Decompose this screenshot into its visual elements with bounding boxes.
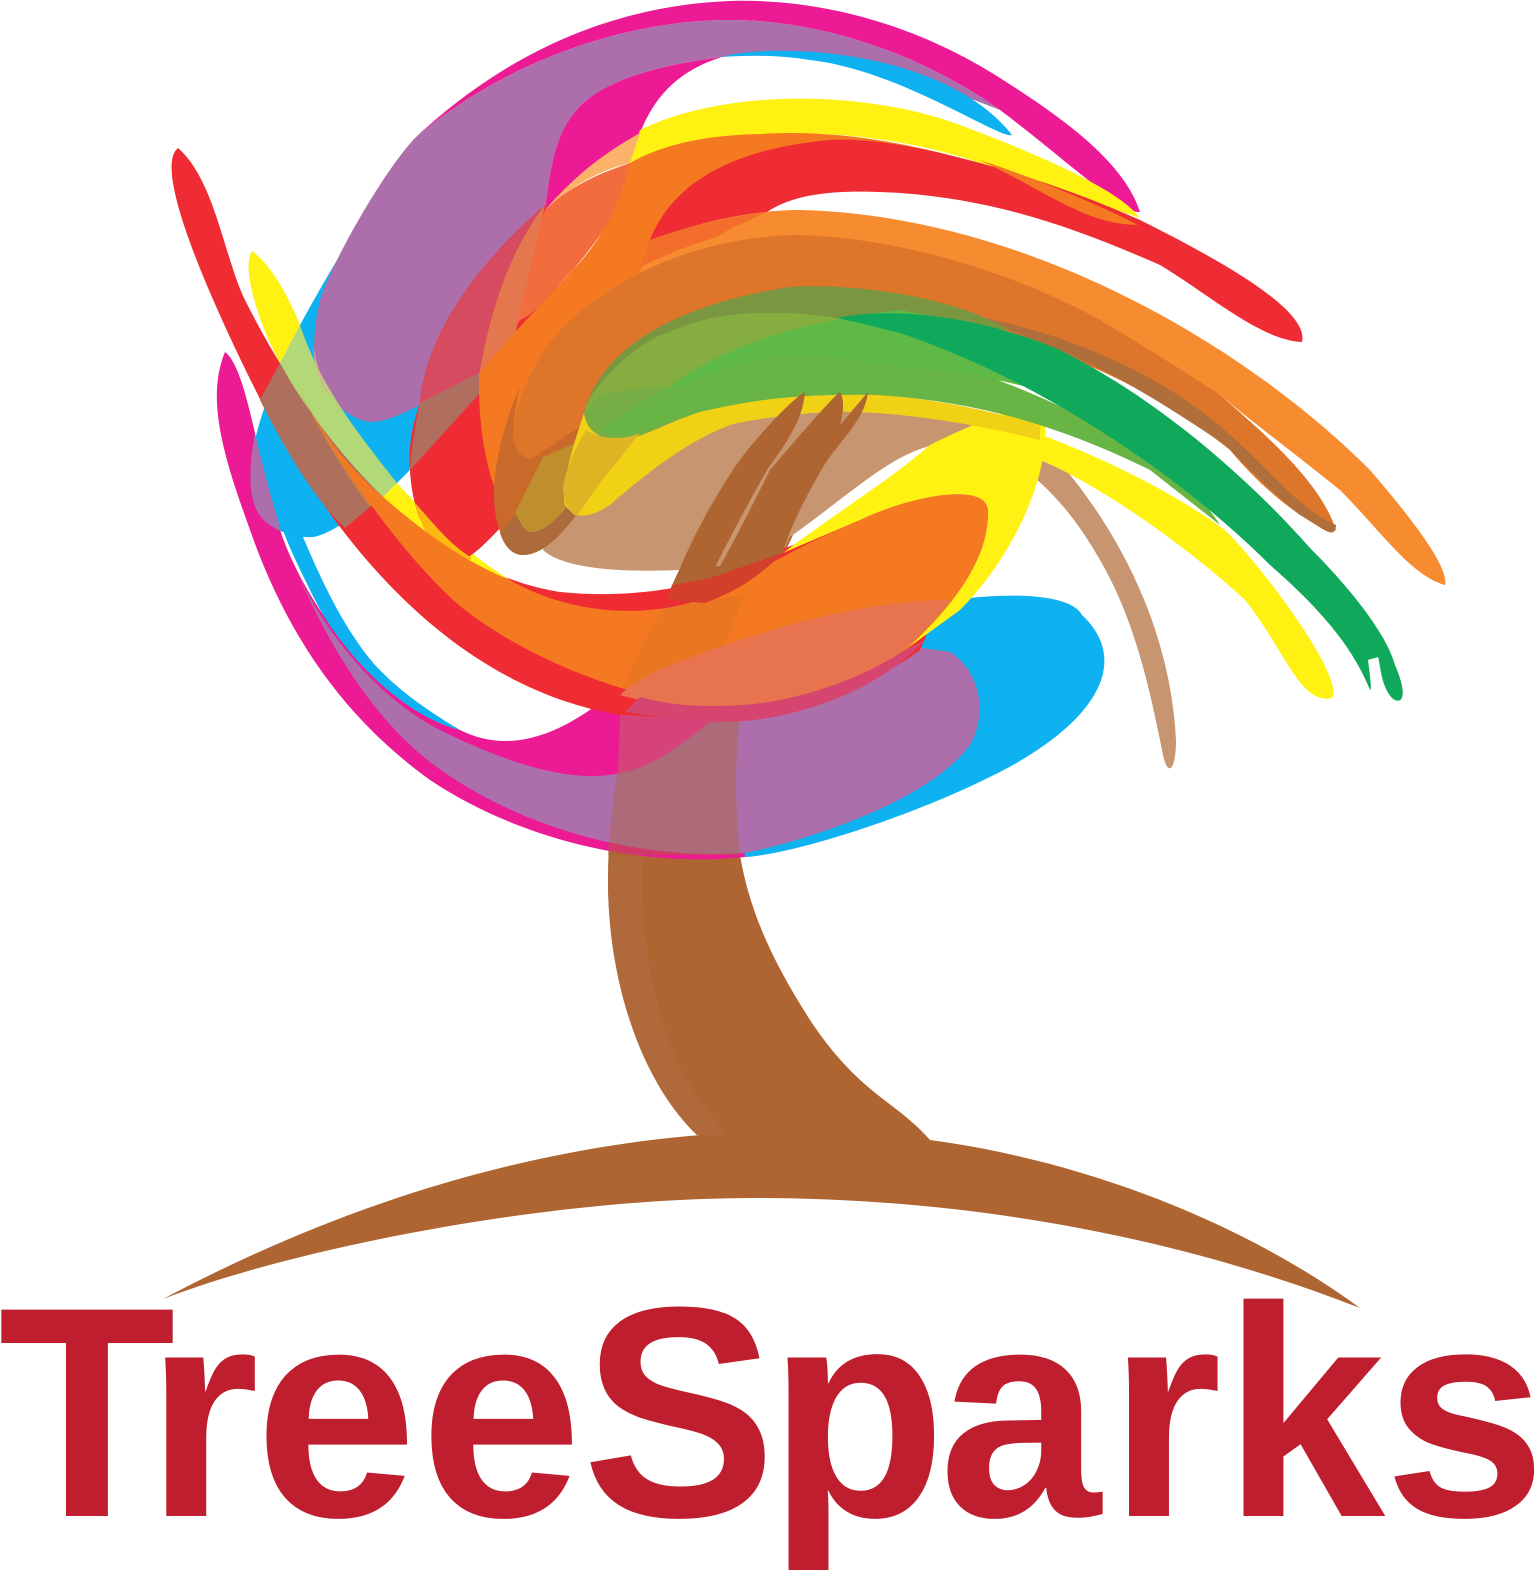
icon: orange sliver over red bbox=[980, 160, 1138, 225]
icon: yellow left stroke tip bbox=[249, 251, 300, 363]
icon: orange red overlap bbox=[505, 163, 630, 345]
icon: pale green overlap bbox=[280, 325, 397, 497]
icon: central red shape bbox=[409, 205, 560, 563]
icon: tan brown overlap bbox=[410, 373, 480, 470]
icon: large orange lower sweep bbox=[297, 387, 988, 706]
icon: dark green stroke bbox=[837, 313, 1403, 701]
icon: upper trunk overlay bbox=[608, 400, 865, 855]
icon: brown lower lobe bbox=[500, 495, 580, 555]
icon: upper red stroke bbox=[650, 140, 1302, 342]
icon: tan purple yellow overlap bbox=[313, 345, 342, 410]
icon: lower purple sweep bbox=[292, 560, 980, 854]
icon: crimson band over purple bbox=[625, 640, 925, 722]
icon: thin cyan arc bbox=[720, 51, 1012, 135]
icon: lower magenta sweep bbox=[217, 352, 745, 859]
icon: gold lobe bbox=[515, 440, 583, 532]
icon: lower left cyan sliver bbox=[278, 492, 460, 730]
icon: light orange sliver bbox=[545, 133, 640, 210]
icon: crimson overlap bbox=[420, 205, 545, 403]
icon: upper magenta arc bbox=[415, 1, 1140, 212]
icon: upper orange band bbox=[479, 133, 1138, 520]
icon: upper left blue sweep bbox=[251, 138, 520, 537]
icon: ochre band bbox=[564, 395, 1040, 516]
icon: brown orange middle stroke bbox=[513, 235, 1336, 531]
icon: hanging yellow stroke bbox=[783, 410, 1045, 650]
icon: ground arc bbox=[163, 1131, 1360, 1308]
icon: orange tan overlap bbox=[297, 387, 383, 507]
icon: upper purple sweep bbox=[314, 20, 1000, 422]
icon: rose overlap on magenta bbox=[618, 715, 710, 773]
icon: brown orange left lobe bbox=[494, 387, 600, 555]
icon: olive green stroke bbox=[584, 286, 1010, 430]
icon: green lobe bbox=[584, 385, 700, 440]
icon: lime green body bbox=[660, 310, 1150, 430]
icon: second branch bbox=[714, 392, 868, 577]
icon: branch over red overlap bbox=[667, 553, 783, 603]
icon: light olive green stroke bbox=[584, 313, 920, 430]
icon: red orange overlap bbox=[640, 212, 767, 267]
icon: upper yellow arc bbox=[630, 99, 1140, 218]
icon: lower green body bbox=[600, 347, 1220, 525]
icon: gold overlap on ochre bbox=[563, 430, 640, 516]
icon: purple overlap of blue and magenta bbox=[251, 433, 281, 531]
icon: lower rose overlap bbox=[620, 600, 950, 709]
icon: long red left stroke bbox=[172, 148, 985, 720]
icon: trunk bbox=[608, 400, 930, 1140]
icon: tan right branch body bbox=[543, 405, 1176, 768]
icon: trunk light band bbox=[608, 857, 730, 1135]
icon: amber overlap bbox=[415, 503, 472, 565]
icon: tan orange overlap bbox=[479, 205, 545, 376]
icon: yellow right stroke bbox=[1000, 420, 1333, 699]
icon: dark brown thin stroke bbox=[930, 310, 1336, 532]
icon: first branch bbox=[672, 392, 805, 590]
icon: trunk shadow in orange bbox=[620, 595, 745, 706]
icon: yellow left stroke tail bbox=[383, 483, 510, 580]
icon: orange top right stroke bbox=[600, 210, 1445, 585]
icon: magenta patch bbox=[545, 57, 722, 210]
icon: brown overlap of red and blue bbox=[260, 363, 383, 528]
icon: lower blue sweep bbox=[640, 596, 1104, 857]
